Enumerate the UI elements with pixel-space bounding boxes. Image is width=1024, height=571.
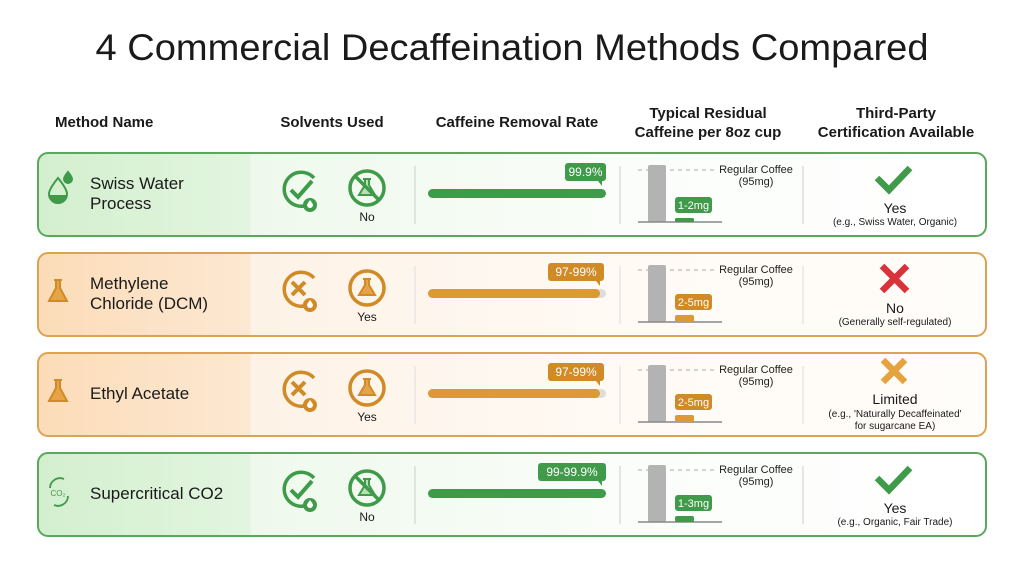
certification: Yes <box>884 200 906 216</box>
method name: Process <box>90 194 151 213</box>
method name: Chloride (DCM) <box>90 294 208 313</box>
certification: (e.g., Organic, Fair Trade) <box>837 517 953 528</box>
certification: Limited <box>872 391 918 407</box>
residual chart <box>638 364 793 422</box>
row: Ethyl Acetate <box>38 353 986 436</box>
residual chart: 1-2mg <box>678 200 709 212</box>
row: Methylene Chloride <box>38 253 986 336</box>
certification: (e.g., Swiss Water, Organic) <box>833 217 957 228</box>
method name: Ethyl Acetate <box>90 384 189 403</box>
icon: CO2 cycle: CO₂ <box>50 489 66 498</box>
residual chart: Regular Coffee <box>719 264 793 276</box>
residual chart: (95mg) <box>739 476 773 488</box>
column headers: Typical Residual <box>649 105 767 122</box>
column headers: Third-Party <box>856 105 937 122</box>
residual chart: Regular Coffee <box>719 464 793 476</box>
column headers: Caffeine per 8oz cup <box>635 124 781 141</box>
residual chart <box>638 464 793 522</box>
icon: CO2 cycle <box>50 478 68 506</box>
residual chart <box>638 264 793 322</box>
method name: Swiss Water <box>90 174 184 193</box>
residual chart: Regular Coffee <box>719 364 793 376</box>
removal bar <box>428 163 606 198</box>
column headers: Solvents Used <box>280 114 384 131</box>
certification: for sugarcane EA) <box>855 421 935 432</box>
icon: flask <box>49 380 67 401</box>
icon: water drops <box>49 172 72 203</box>
residual chart <box>638 164 793 222</box>
removal bar: 97-99% <box>555 365 597 379</box>
solvents icons: Yes <box>357 310 377 324</box>
certification: (e.g., 'Naturally Decaffeinated' <box>828 409 962 420</box>
title: 4 Commercial Decaffeination Methods Compared <box>96 26 929 68</box>
certification <box>837 468 953 528</box>
removal bar: 99-99.9% <box>546 465 598 479</box>
solvents icons: No <box>359 210 375 224</box>
removal bar: 97-99% <box>555 265 597 279</box>
certification: (Generally self-regulated) <box>839 317 951 328</box>
removal bar <box>428 363 606 398</box>
residual chart: 1-3mg <box>678 498 709 510</box>
method name: Supercritical CO2 <box>90 484 223 503</box>
icon: flask <box>49 280 67 301</box>
certification: Yes <box>884 500 906 516</box>
residual chart: (95mg) <box>739 276 773 288</box>
residual chart: (95mg) <box>739 176 773 188</box>
solvents icons <box>284 371 384 424</box>
certification <box>839 266 951 328</box>
solvents icons <box>284 271 384 324</box>
solvents icons: Yes <box>357 410 377 424</box>
row: Supercritical CO2 <box>38 453 986 536</box>
certification: No <box>886 300 904 316</box>
method name: Methylene <box>90 274 168 293</box>
column headers <box>55 105 974 141</box>
solvents icons: No <box>359 510 375 524</box>
solvents icons <box>284 171 384 224</box>
residual chart: (95mg) <box>739 376 773 388</box>
removal bar: 99.9% <box>568 165 603 179</box>
certification <box>833 168 957 228</box>
certification <box>828 360 962 432</box>
removal bar <box>428 263 606 298</box>
residual chart: 2-5mg <box>678 297 709 309</box>
column headers: Certification Available <box>818 124 974 141</box>
column headers: Caffeine Removal Rate <box>436 114 598 131</box>
residual chart: Regular Coffee <box>719 164 793 176</box>
residual chart: 2-5mg <box>678 397 709 409</box>
row: Swiss Water Process <box>38 153 986 236</box>
removal bar <box>428 463 606 498</box>
column headers: Method Name <box>55 114 153 131</box>
solvents icons <box>284 471 384 524</box>
